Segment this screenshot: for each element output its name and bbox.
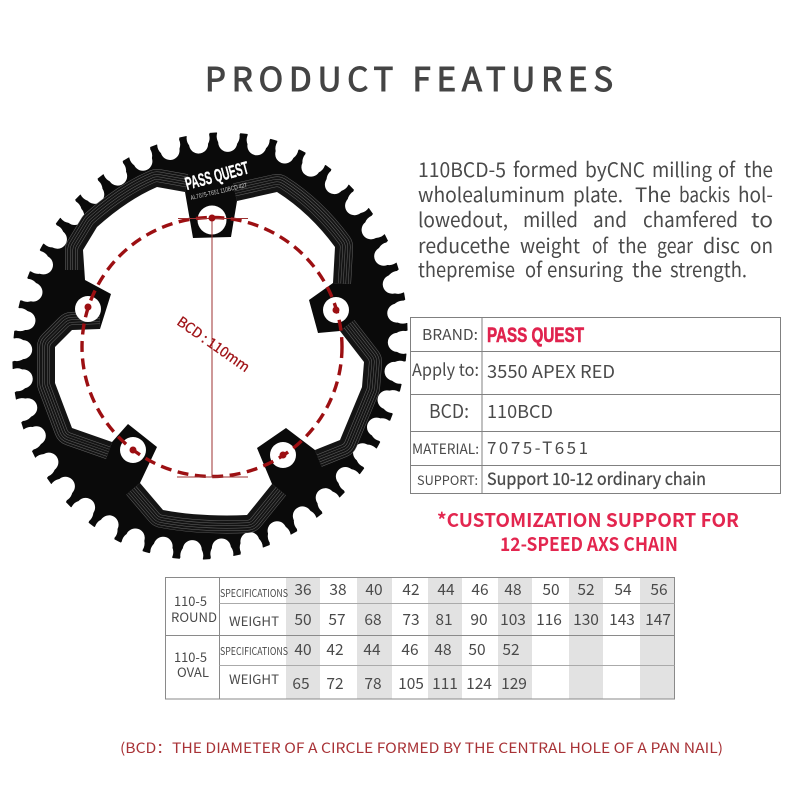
row labels: SPECIFICATIONS bbox=[220, 586, 288, 601]
row: BCD bbox=[429, 397, 553, 424]
round specifications row: 54 bbox=[614, 578, 632, 600]
description paragraph: strength. bbox=[670, 254, 747, 283]
description paragraph: of bbox=[525, 254, 543, 283]
chainring logo: PASS QUEST bbox=[183, 158, 251, 194]
description paragraph: ensuring bbox=[547, 254, 623, 283]
description paragraph: weight bbox=[520, 230, 580, 259]
oval specifications row: 48 bbox=[434, 638, 452, 660]
round weight row: 90 bbox=[470, 608, 488, 630]
description paragraph bbox=[418, 154, 773, 283]
round weight row: 68 bbox=[364, 608, 382, 630]
oval specifications row: 40 bbox=[294, 638, 312, 660]
oval specifications row bbox=[294, 638, 520, 660]
round specifications row bbox=[294, 578, 668, 600]
description paragraph: to bbox=[751, 204, 773, 233]
table grid bbox=[410, 318, 780, 494]
BCD diameter line bbox=[177, 218, 248, 477]
description paragraph: thepremise bbox=[418, 254, 515, 283]
oval weight row: 129 bbox=[501, 672, 527, 694]
round weight row: 130 bbox=[573, 608, 599, 630]
description paragraph: milling bbox=[652, 154, 712, 183]
description paragraph: the bbox=[744, 154, 773, 183]
round specifications row: 48 bbox=[504, 578, 522, 600]
oval weight row: 78 bbox=[364, 672, 382, 694]
description paragraph: The bbox=[635, 179, 671, 208]
customization callout: *CUSTOMIZATION SUPPORT FOR bbox=[437, 506, 739, 533]
round specifications row: 56 bbox=[650, 578, 668, 600]
row labels: WEIGHT bbox=[229, 611, 279, 630]
row labels: ROUND bbox=[171, 607, 217, 626]
oval specifications row: 50 bbox=[468, 638, 486, 660]
oval weight row: 105 bbox=[398, 672, 424, 694]
BCD measurement overlay bbox=[82, 214, 342, 477]
title: PRODUCT FEATURES bbox=[205, 53, 613, 101]
chainring centre cutout bbox=[55, 187, 364, 515]
oval specifications row: 46 bbox=[401, 638, 419, 660]
round weight row: 81 bbox=[435, 608, 453, 630]
oval specifications row: 44 bbox=[363, 638, 381, 660]
table grid bbox=[166, 578, 674, 699]
row: apply to bbox=[412, 356, 615, 384]
chainring disc with teeth bbox=[0, 71, 472, 621]
row labels bbox=[171, 586, 288, 688]
BCD dashed circle bbox=[82, 218, 342, 476]
description paragraph: the bbox=[632, 254, 662, 283]
round weight row: 73 bbox=[402, 608, 420, 630]
row labels: 110-5 bbox=[174, 591, 207, 610]
chainring illustration bbox=[0, 71, 472, 621]
description paragraph: on bbox=[750, 230, 773, 259]
round specifications row: 38 bbox=[329, 578, 347, 600]
round specifications row: 46 bbox=[471, 578, 489, 600]
oval weight row bbox=[292, 672, 527, 694]
round weight row: 143 bbox=[609, 608, 635, 630]
bolt holes bbox=[75, 206, 349, 468]
description paragraph: gear bbox=[657, 230, 693, 259]
round weight row bbox=[294, 608, 671, 630]
row: apply to: 3550 APEX RED bbox=[487, 358, 615, 384]
description paragraph: reducethe bbox=[418, 230, 510, 259]
round weight row: 57 bbox=[328, 608, 346, 630]
grey column stripes bbox=[286, 577, 674, 699]
chainring engraving: AL7075-T651 110BCD 42T bbox=[190, 182, 248, 202]
oval specifications row: 42 bbox=[326, 638, 344, 660]
row: support: Support 10-12 ordinary chain bbox=[487, 465, 706, 490]
description paragraph: hol- bbox=[738, 179, 773, 208]
round specifications row: 50 bbox=[542, 578, 560, 600]
row labels: OVAL bbox=[177, 662, 209, 681]
round weight row: 147 bbox=[645, 608, 671, 630]
chamfer lines bbox=[55, 187, 364, 515]
row: BCD: BCD: bbox=[429, 397, 469, 424]
round weight row: 103 bbox=[500, 608, 526, 630]
customization callout bbox=[437, 506, 739, 557]
description paragraph: backis bbox=[679, 179, 730, 208]
customization callout: 12-SPEED AXS CHAIN bbox=[500, 530, 678, 557]
description paragraph: plate. bbox=[573, 179, 623, 208]
description paragraph: the bbox=[618, 230, 647, 259]
round weight row: 50 bbox=[294, 608, 312, 630]
description paragraph: of bbox=[592, 230, 609, 259]
row: apply to: Apply to: bbox=[412, 356, 479, 381]
description paragraph: wholealuminum bbox=[418, 179, 565, 208]
round specifications row: 44 bbox=[437, 578, 455, 600]
description paragraph: byCNC bbox=[585, 154, 645, 183]
row: support: SUPPORT: bbox=[417, 470, 478, 489]
row: BCD: 110BCD bbox=[487, 398, 553, 424]
round specifications row: 52 bbox=[577, 578, 595, 600]
oval weight row: 65 bbox=[292, 672, 310, 694]
description paragraph: and bbox=[593, 204, 627, 233]
oval weight row: 111 bbox=[432, 672, 458, 694]
description paragraph: milled bbox=[523, 204, 578, 233]
row: material: 7075-T651 bbox=[487, 434, 588, 459]
oval specifications row: 52 bbox=[502, 638, 520, 660]
description paragraph: formed bbox=[513, 154, 578, 183]
footnote: (BCD：THE DIAMETER OF A CIRCLE FORMED BY THE CENTRAL HOLE OF A PAN NAIL) bbox=[120, 738, 723, 758]
row labels: WEIGHT bbox=[229, 669, 279, 688]
round specifications row: 42 bbox=[402, 578, 420, 600]
oval weight row: 72 bbox=[326, 672, 344, 694]
BCD hole markers bbox=[84, 214, 340, 458]
description paragraph: 110BCD-5 bbox=[418, 154, 506, 183]
round weight row: 116 bbox=[536, 608, 562, 630]
description paragraph: chamfered bbox=[643, 204, 738, 233]
description paragraph: lowedout, bbox=[418, 204, 508, 233]
row: material bbox=[412, 434, 588, 459]
description paragraph: of bbox=[718, 154, 736, 183]
round specifications row: 36 bbox=[294, 578, 312, 600]
weight table bbox=[166, 577, 674, 699]
BCD label: BCD : 110mm bbox=[173, 312, 254, 377]
row: brand bbox=[422, 324, 584, 347]
row: brand: PASS QUEST bbox=[487, 324, 584, 347]
row labels: 110-5 bbox=[174, 647, 207, 666]
row: material: MATERIAL: bbox=[412, 439, 479, 459]
description paragraph: disc bbox=[703, 230, 740, 259]
row labels: SPECIFICATIONS bbox=[220, 644, 288, 659]
round specifications row: 40 bbox=[365, 578, 383, 600]
row: brand: BRAND: bbox=[422, 324, 478, 345]
product spec table bbox=[410, 318, 780, 494]
oval weight row: 124 bbox=[466, 672, 492, 694]
